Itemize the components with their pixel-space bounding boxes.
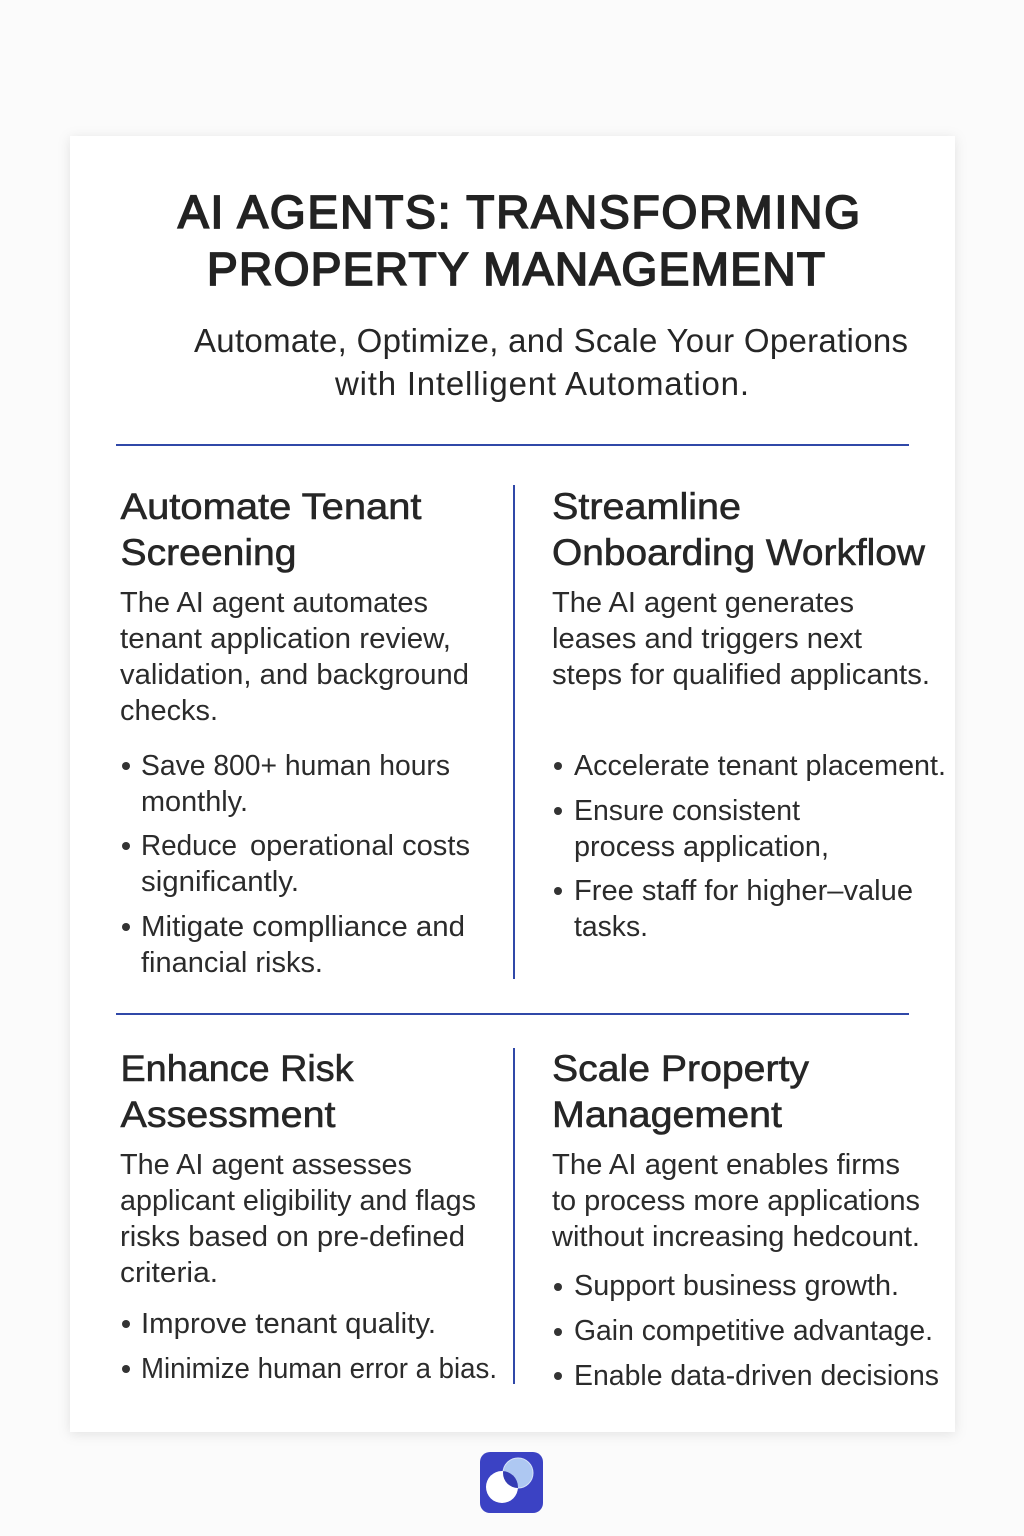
description: tenant screening: tenant application review, — [120, 623, 451, 655]
bullet list: risk assessment: Minimize human error a bias. — [141, 1353, 497, 1385]
description: onboarding: steps for qualified applicants. — [552, 659, 930, 691]
description: risk assessment — [120, 1149, 476, 1289]
heading: enhance risk assessment — [120, 1048, 354, 1135]
bullet list: onboarding: Free staff for higher–value — [574, 875, 913, 907]
bullet list: onboarding: tasks. — [574, 911, 648, 943]
heading: streamline onboarding workflow — [552, 486, 925, 573]
bullet list: tenant screening: monthly. — [141, 786, 248, 818]
description: tenant screening: validation, and background — [120, 659, 469, 691]
description: risk assessment: The AI agent assesses — [120, 1149, 412, 1181]
description: onboarding: The AI agent generates — [552, 587, 854, 619]
bullet list: scale: Enable data-driven decisions — [574, 1360, 939, 1392]
bullet list: risk assessment: Improve tenant quality. — [141, 1308, 436, 1340]
heading: automate tenant screening — [120, 486, 422, 573]
heading: enhance risk assessment: Enhance Risk — [120, 1048, 354, 1089]
description: onboarding — [552, 587, 930, 691]
subtitle: with Intelligent Automation. — [334, 365, 749, 402]
subtitle — [194, 322, 908, 402]
bullet list: onboarding — [554, 750, 946, 943]
description: scale — [551, 1149, 920, 1253]
icon: logo — [480, 1452, 543, 1513]
title — [178, 186, 860, 295]
heading: streamline onboarding workflow: Streamline — [552, 486, 741, 527]
description: risk assessment: applicant eligibility and flags — [120, 1185, 476, 1217]
panel: automate tenant screening — [120, 486, 470, 979]
heading: enhance risk assessment: Assessment — [120, 1094, 336, 1135]
bullet list: tenant screening: financial risks. — [141, 947, 323, 979]
bullet list: risk assessment — [122, 1308, 497, 1385]
bullet list: scale: Gain competitive advantage. — [574, 1315, 933, 1347]
panel: enhance risk assessment — [120, 1048, 497, 1385]
description: scale: to process more applications — [552, 1185, 920, 1217]
bullet list: tenant screening: Reduce — [141, 830, 237, 862]
bullet list: tenant screening: Save 800+ human hours — [141, 750, 450, 782]
bullet list: tenant screening: operational costs — [250, 830, 470, 862]
bullet list: tenant screening: Mitigate complliance and — [141, 911, 465, 943]
bullet list: scale: Support business growth. — [574, 1270, 899, 1302]
bullet list: scale — [554, 1270, 939, 1392]
bullet list: onboarding: Ensure consistent — [574, 795, 800, 827]
description: scale: without increasing hedcount. — [551, 1221, 920, 1253]
bullet list: tenant screening: significantly. — [141, 866, 299, 898]
panel: streamline onboarding workflow — [552, 486, 946, 943]
heading: automate tenant screening: Automate Tenant — [120, 486, 422, 527]
title: PROPERTY MANAGEMENT — [207, 243, 825, 295]
panel: main card — [70, 136, 955, 1432]
description: scale: The AI agent enables firms — [552, 1149, 900, 1181]
description: tenant screening — [120, 587, 469, 727]
description: onboarding: leases and triggers next — [552, 623, 862, 655]
heading: scale property management: Scale Property — [552, 1048, 810, 1089]
heading: scale property management: Management — [552, 1094, 783, 1135]
title: AI AGENTS: TRANSFORMING — [178, 186, 860, 238]
description: risk assessment: criteria. — [120, 1257, 218, 1289]
heading: streamline onboarding workflow: Onboarding Workflow — [552, 532, 925, 573]
description: tenant screening: checks. — [120, 695, 218, 727]
bullet list: onboarding: Accelerate tenant placement. — [574, 750, 946, 782]
heading: scale property management — [552, 1048, 810, 1135]
subtitle: Automate, Optimize, and Scale Your Operations — [194, 322, 908, 359]
description: risk assessment: risks based on pre-defined — [120, 1221, 465, 1253]
bullet list: tenant screening — [122, 750, 470, 979]
bullet list: onboarding: process application, — [574, 831, 829, 863]
description: tenant screening: The AI agent automates — [120, 587, 428, 619]
panel: scale property management — [551, 1048, 939, 1392]
heading: automate tenant screening: Screening — [120, 532, 296, 573]
